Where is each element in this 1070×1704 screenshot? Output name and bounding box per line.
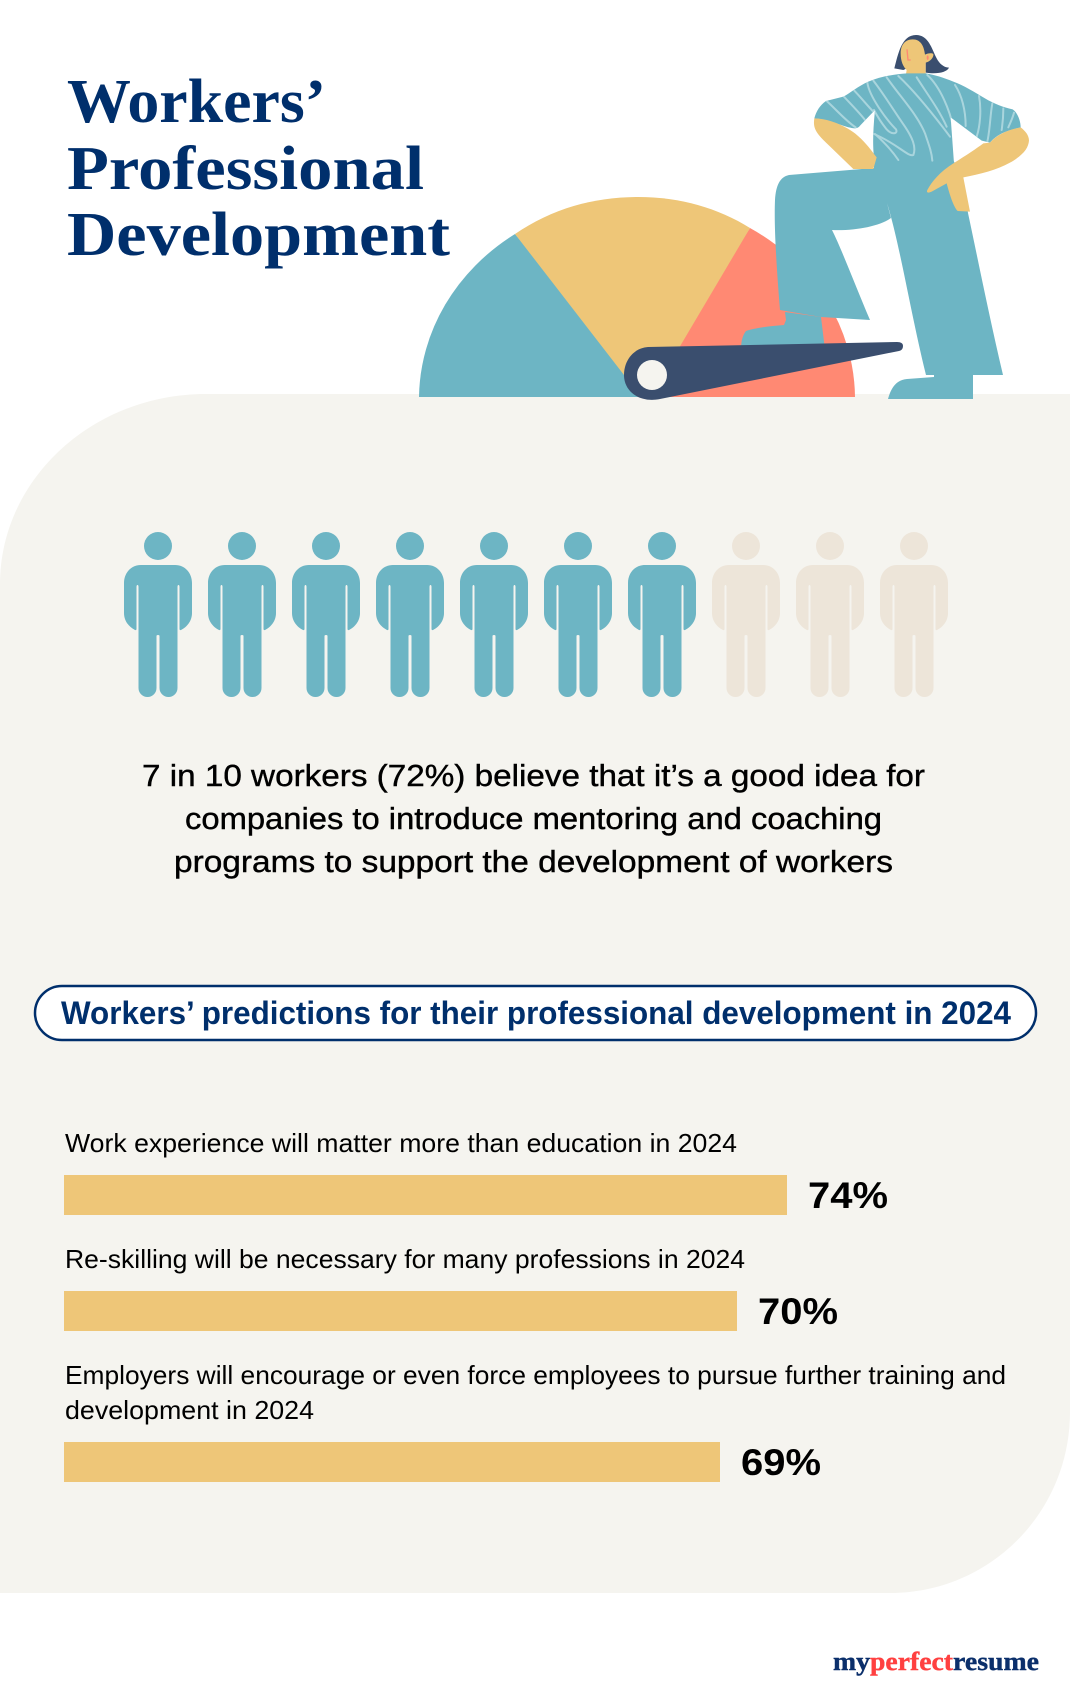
person 3 <box>292 532 360 697</box>
needle hub <box>637 360 667 390</box>
bar row 2 <box>64 1244 838 1332</box>
person 9 <box>796 532 864 697</box>
bar chart <box>64 1128 1006 1483</box>
bar row 1 <box>64 1128 888 1216</box>
logo <box>833 1647 1039 1676</box>
title: Workers’ <box>67 68 326 136</box>
upper body <box>814 35 1029 212</box>
title <box>67 68 450 269</box>
bar row 3: Employers will encourage or even force employees to pursue further training and <box>65 1360 1006 1390</box>
bar row 2: 70% <box>758 1291 838 1332</box>
bar row 1: Work experience will matter more than education in 2024 <box>65 1128 737 1158</box>
heading pill <box>35 986 1036 1040</box>
shirt stripes <box>827 75 1014 161</box>
hair <box>894 35 949 73</box>
text block: statistic: programs to support the development of workers <box>174 844 893 879</box>
logo: resume <box>953 1647 1039 1676</box>
heading pill: Workers’ predictions for their professional development in 2024 <box>61 995 1011 1031</box>
person 10 <box>880 532 948 697</box>
pictogram: 7 of 10 people <box>124 532 948 697</box>
left arm <box>814 118 877 169</box>
bar row 1: 74% <box>808 1175 888 1216</box>
logo: my <box>833 1647 870 1676</box>
bar row 3: 69% <box>741 1442 821 1483</box>
title: Professional <box>67 135 424 203</box>
bar row 3: development in 2024 <box>65 1395 314 1425</box>
person 7 <box>628 532 696 697</box>
nose <box>907 49 911 60</box>
gauge needle <box>624 342 903 400</box>
bar row 3 <box>64 1360 1006 1483</box>
text block: statistic <box>142 758 925 879</box>
logo: perfect <box>870 1647 953 1676</box>
face and neck <box>901 39 933 74</box>
ear detail <box>927 55 929 60</box>
trousers <box>775 160 1003 375</box>
right arm <box>927 127 1029 212</box>
person 4 <box>376 532 444 697</box>
person 5 <box>460 532 528 697</box>
illustration: woman standing on gauge <box>741 35 1029 399</box>
shirt <box>814 73 1021 170</box>
panel: main background <box>0 394 1070 1593</box>
bar row 2: Re-skilling will be necessary for many professions in 2024 <box>65 1244 745 1274</box>
raised foot <box>741 312 825 350</box>
standing foot <box>888 372 973 399</box>
gauge dial <box>419 197 855 397</box>
title: Development <box>67 201 450 269</box>
person 8 <box>712 532 780 697</box>
text block: statistic: companies to introduce mentoring and coaching <box>185 801 882 836</box>
person 6 <box>544 532 612 697</box>
person 2 <box>208 532 276 697</box>
text block: statistic: 7 in 10 workers (72%) believe that it’s a good idea for <box>142 758 925 793</box>
person 1 <box>124 532 192 697</box>
